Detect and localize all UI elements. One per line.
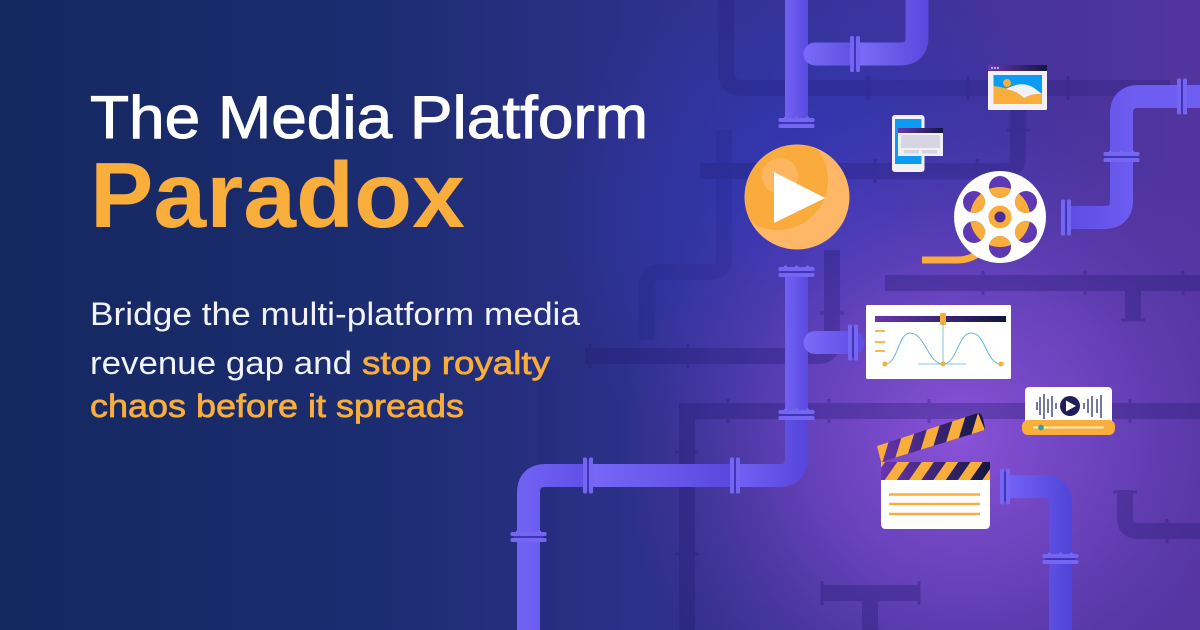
title	[90, 84, 648, 247]
pipe: bottom elbow	[1003, 486, 1060, 630]
audio player card	[1022, 387, 1115, 435]
icon: film reel	[922, 171, 1046, 263]
pipe: right elbow	[1065, 96, 1200, 218]
pipe: lower main	[528, 415, 796, 630]
icon: phone and window	[892, 115, 943, 172]
title: The Media Platform	[90, 84, 648, 151]
icon: image window	[988, 65, 1047, 110]
title: Paradox	[90, 143, 465, 247]
pipe: side stub	[815, 331, 853, 354]
background dark pipes	[545, 0, 1200, 630]
pipe flanges	[510, 36, 1187, 564]
main pipes	[528, 0, 1200, 630]
chart card	[866, 305, 1011, 379]
pipe: top branch	[815, 0, 917, 54]
subtitle: stop royalty	[362, 345, 550, 381]
subtitle: revenue gap and	[90, 345, 352, 381]
subtitle	[90, 296, 580, 424]
pipe: lower main upper run	[785, 272, 808, 415]
icon: clapperboard	[877, 413, 990, 529]
pipe: top vertical	[785, 0, 808, 123]
subtitle: chaos before it spreads	[90, 388, 464, 424]
subtitle: Bridge the multi-platform media	[90, 296, 580, 332]
icon: play button	[728, 130, 850, 250]
